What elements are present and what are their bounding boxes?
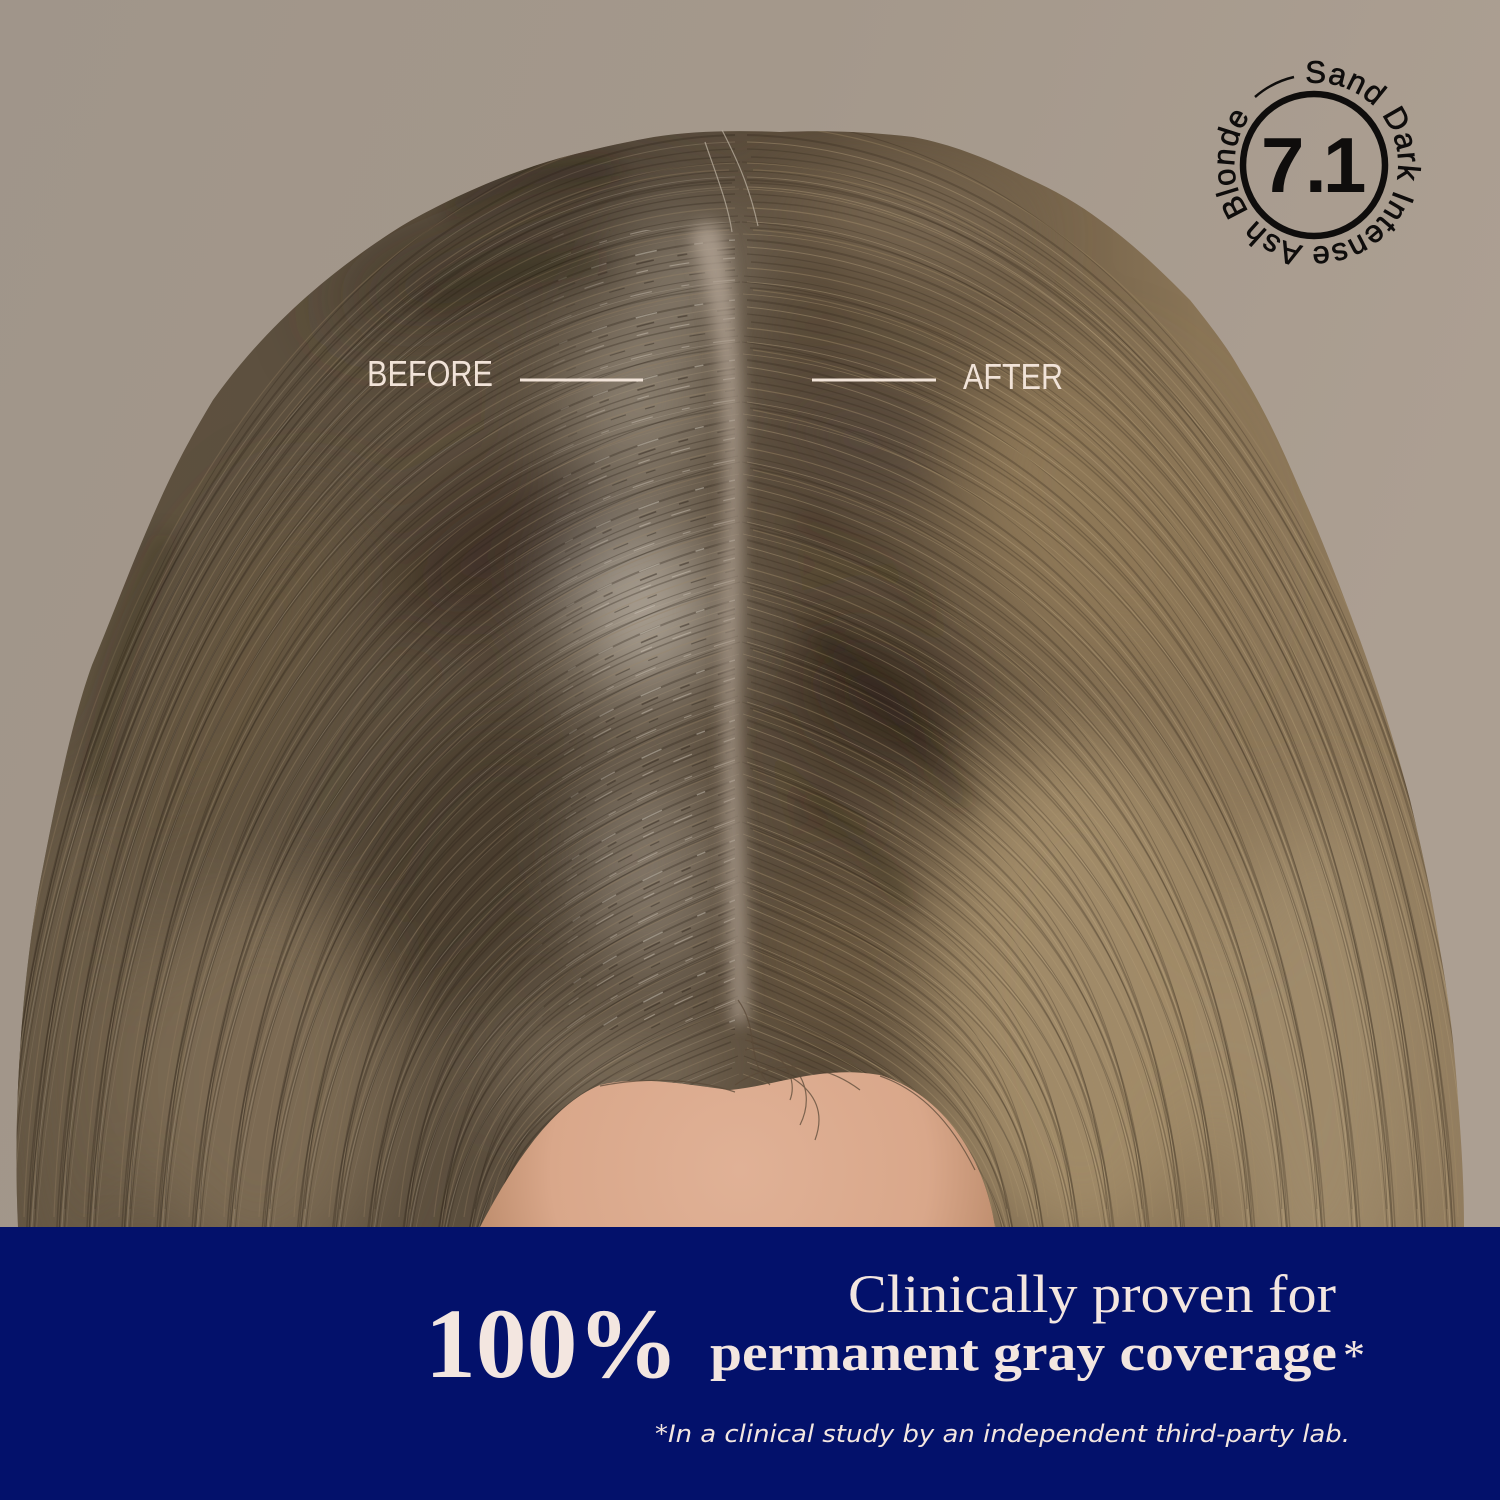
headline line one: Clinically proven for: [848, 1264, 1336, 1324]
100% stat: 100%: [425, 1288, 679, 1399]
footnote: *In a clinical study by an independent third-party lab.: [655, 1420, 1350, 1448]
after label: [812, 356, 1063, 397]
hair strands: left side: [0, 117, 740, 1281]
before label: [367, 353, 643, 394]
shade badge 7.1: 7.1: [1261, 121, 1366, 209]
center part line: [690, 223, 748, 1025]
gray roots left of the part: [532, 230, 735, 1030]
hair strands: right side: [742, 117, 1483, 1281]
before label: BEFORE: [367, 353, 493, 394]
bottom claim panel: [0, 1227, 1500, 1500]
shade badge 7.1: Sand Dark Intense Ash Blonde: [1216, 60, 1422, 265]
hair photo illustration: [16, 131, 1464, 1227]
headline line two: permanent gray coverage: [710, 1325, 1337, 1382]
baby hairs at the hairline: [600, 1000, 975, 1170]
after label: AFTER: [963, 356, 1063, 397]
asterisk: *: [1343, 1331, 1365, 1380]
forehead skin: [460, 1040, 1020, 1230]
flyaway gray hairs at the crown: [705, 130, 758, 232]
dark streaks: [95, 170, 960, 900]
